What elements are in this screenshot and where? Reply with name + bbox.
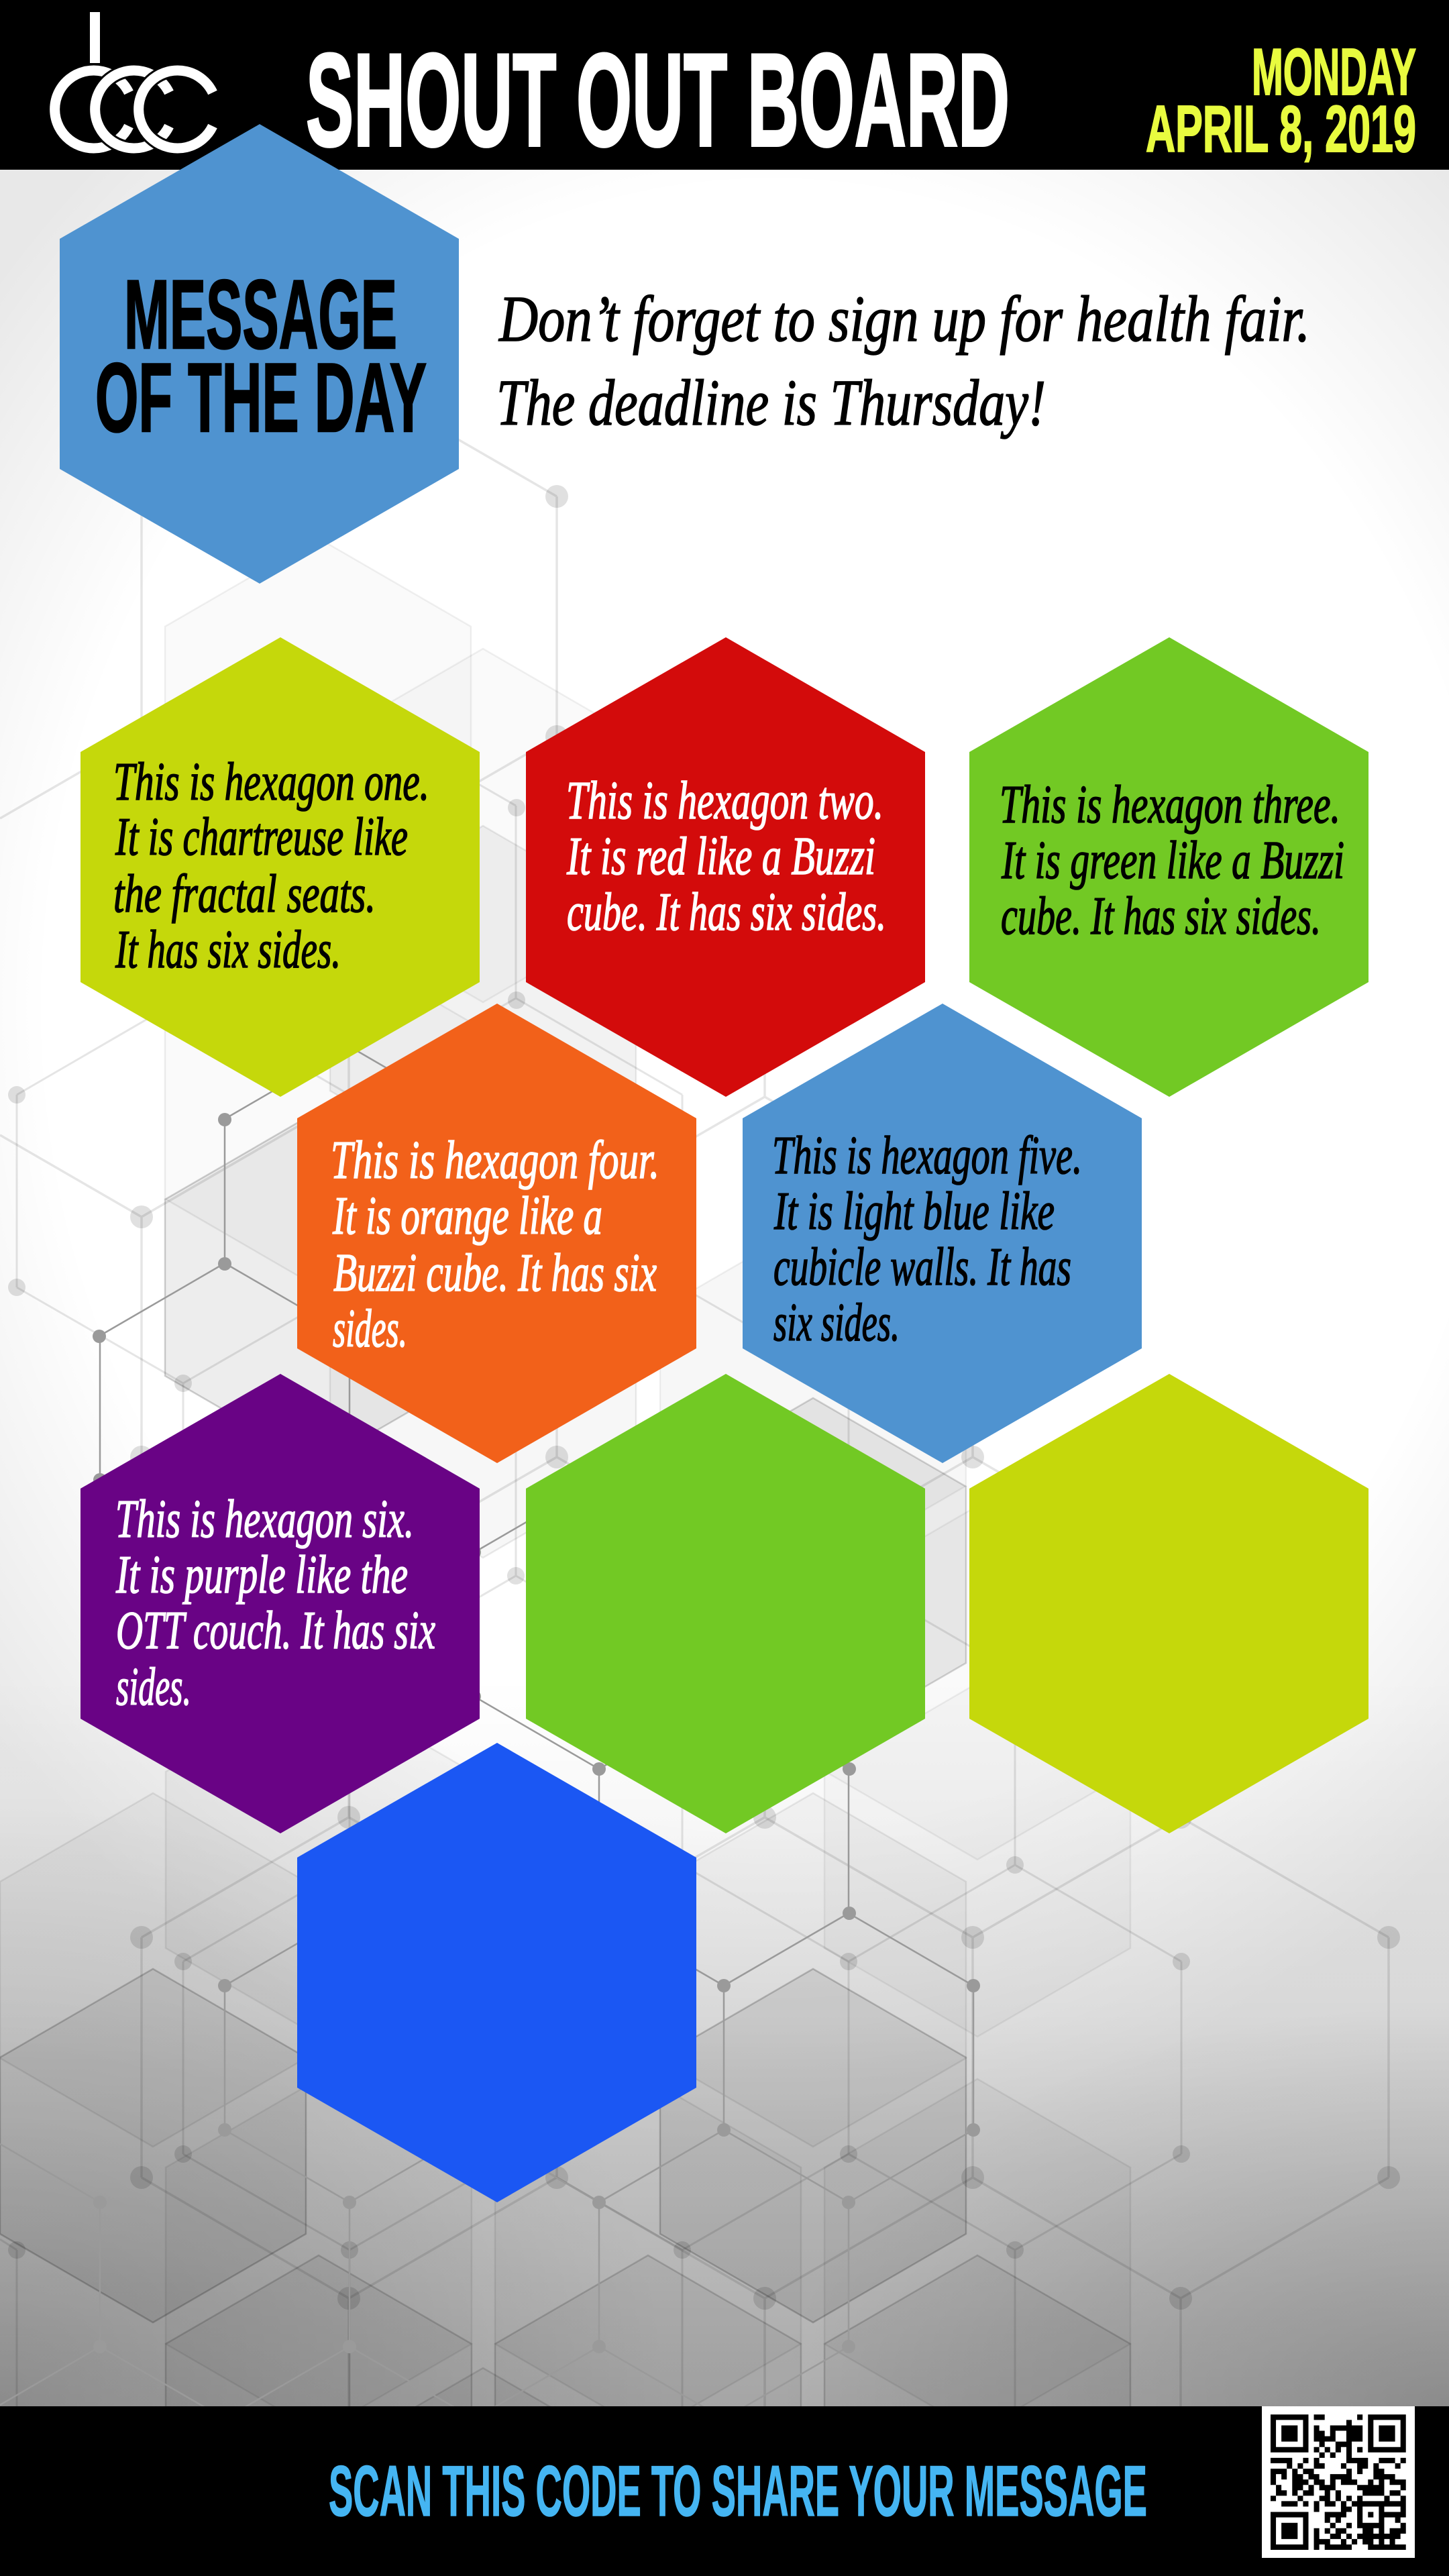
- hexagon three text: [1000, 775, 1344, 946]
- hexagon one text: [113, 753, 429, 979]
- hexagon six text: [115, 1490, 435, 1717]
- hexagon three text: cube. It has six sides.: [1001, 887, 1321, 946]
- hexagon five text: It is light blue like: [773, 1182, 1055, 1241]
- panel: hexagon six, purple: [80, 1374, 480, 1833]
- heading: message of the day: [95, 260, 427, 452]
- hexagon five text: This is hexagon five.: [772, 1126, 1082, 1185]
- hexagon six text: OTT couch. It has six: [116, 1601, 435, 1660]
- panel: empty chartreuse hexagon: [969, 1374, 1368, 1833]
- background: dark network: [0, 1046, 980, 2408]
- hexagon two text: cube. It has six sides.: [567, 883, 886, 942]
- background: translucent hexagon tiles: [0, 538, 1130, 2408]
- hexagon five text: cubicle walls. It has: [773, 1238, 1071, 1297]
- hexagon five text: [772, 1126, 1082, 1352]
- panel: hexagon one, chartreuse: [80, 637, 480, 1097]
- panel: hexagon three, green: [969, 637, 1368, 1097]
- hexagon two text: This is hexagon two.: [566, 771, 883, 830]
- panel: hexagon five, light blue: [743, 1004, 1142, 1463]
- hexagon six text: This is hexagon six.: [115, 1490, 414, 1549]
- background: medium light network: [0, 710, 1190, 2408]
- hexagon six text: sides.: [116, 1658, 191, 1717]
- hexagon five text: six sides.: [773, 1293, 900, 1352]
- QR code: [1262, 2406, 1415, 2558]
- hexagon one text: It is chartreuse like: [115, 808, 408, 867]
- message of the day text: [496, 283, 1310, 439]
- footer bar: [0, 2406, 1449, 2576]
- header bar: [0, 0, 1449, 170]
- panel: empty blue hexagon: [297, 1743, 696, 2202]
- panel: message of the day hexagon: [60, 124, 459, 584]
- hexagon six text: It is purple like the: [115, 1546, 408, 1605]
- hexagon four text: [331, 1131, 659, 1358]
- hexagon four text: This is hexagon four.: [331, 1131, 659, 1190]
- hexagon two text: [566, 771, 886, 942]
- background: large light network: [0, 376, 1400, 2408]
- date: [1146, 35, 1416, 166]
- hexagon four text: Buzzi cube. It has six: [333, 1244, 657, 1303]
- logo: bar and three interlocked rings: [55, 12, 213, 148]
- heading: message of the day: OF THE DAY: [95, 343, 427, 452]
- hexagon two text: It is red like a Buzzi: [566, 827, 875, 886]
- message of the day text: The deadline is Thursday!: [496, 367, 1046, 439]
- hexagon one text: It has six sides.: [115, 920, 341, 979]
- panel: empty green hexagon: [526, 1374, 925, 1833]
- panel: hexagon two, red: [526, 637, 925, 1097]
- hexagon four text: sides.: [333, 1299, 407, 1358]
- hexagon one text: the fractal seats.: [113, 865, 376, 924]
- hexagon one text: This is hexagon one.: [113, 753, 429, 812]
- heading: message of the day: MESSAGE: [124, 260, 397, 369]
- panel: hexagon four, orange: [297, 1004, 696, 1463]
- hexagon four text: It is orange like a: [332, 1187, 602, 1246]
